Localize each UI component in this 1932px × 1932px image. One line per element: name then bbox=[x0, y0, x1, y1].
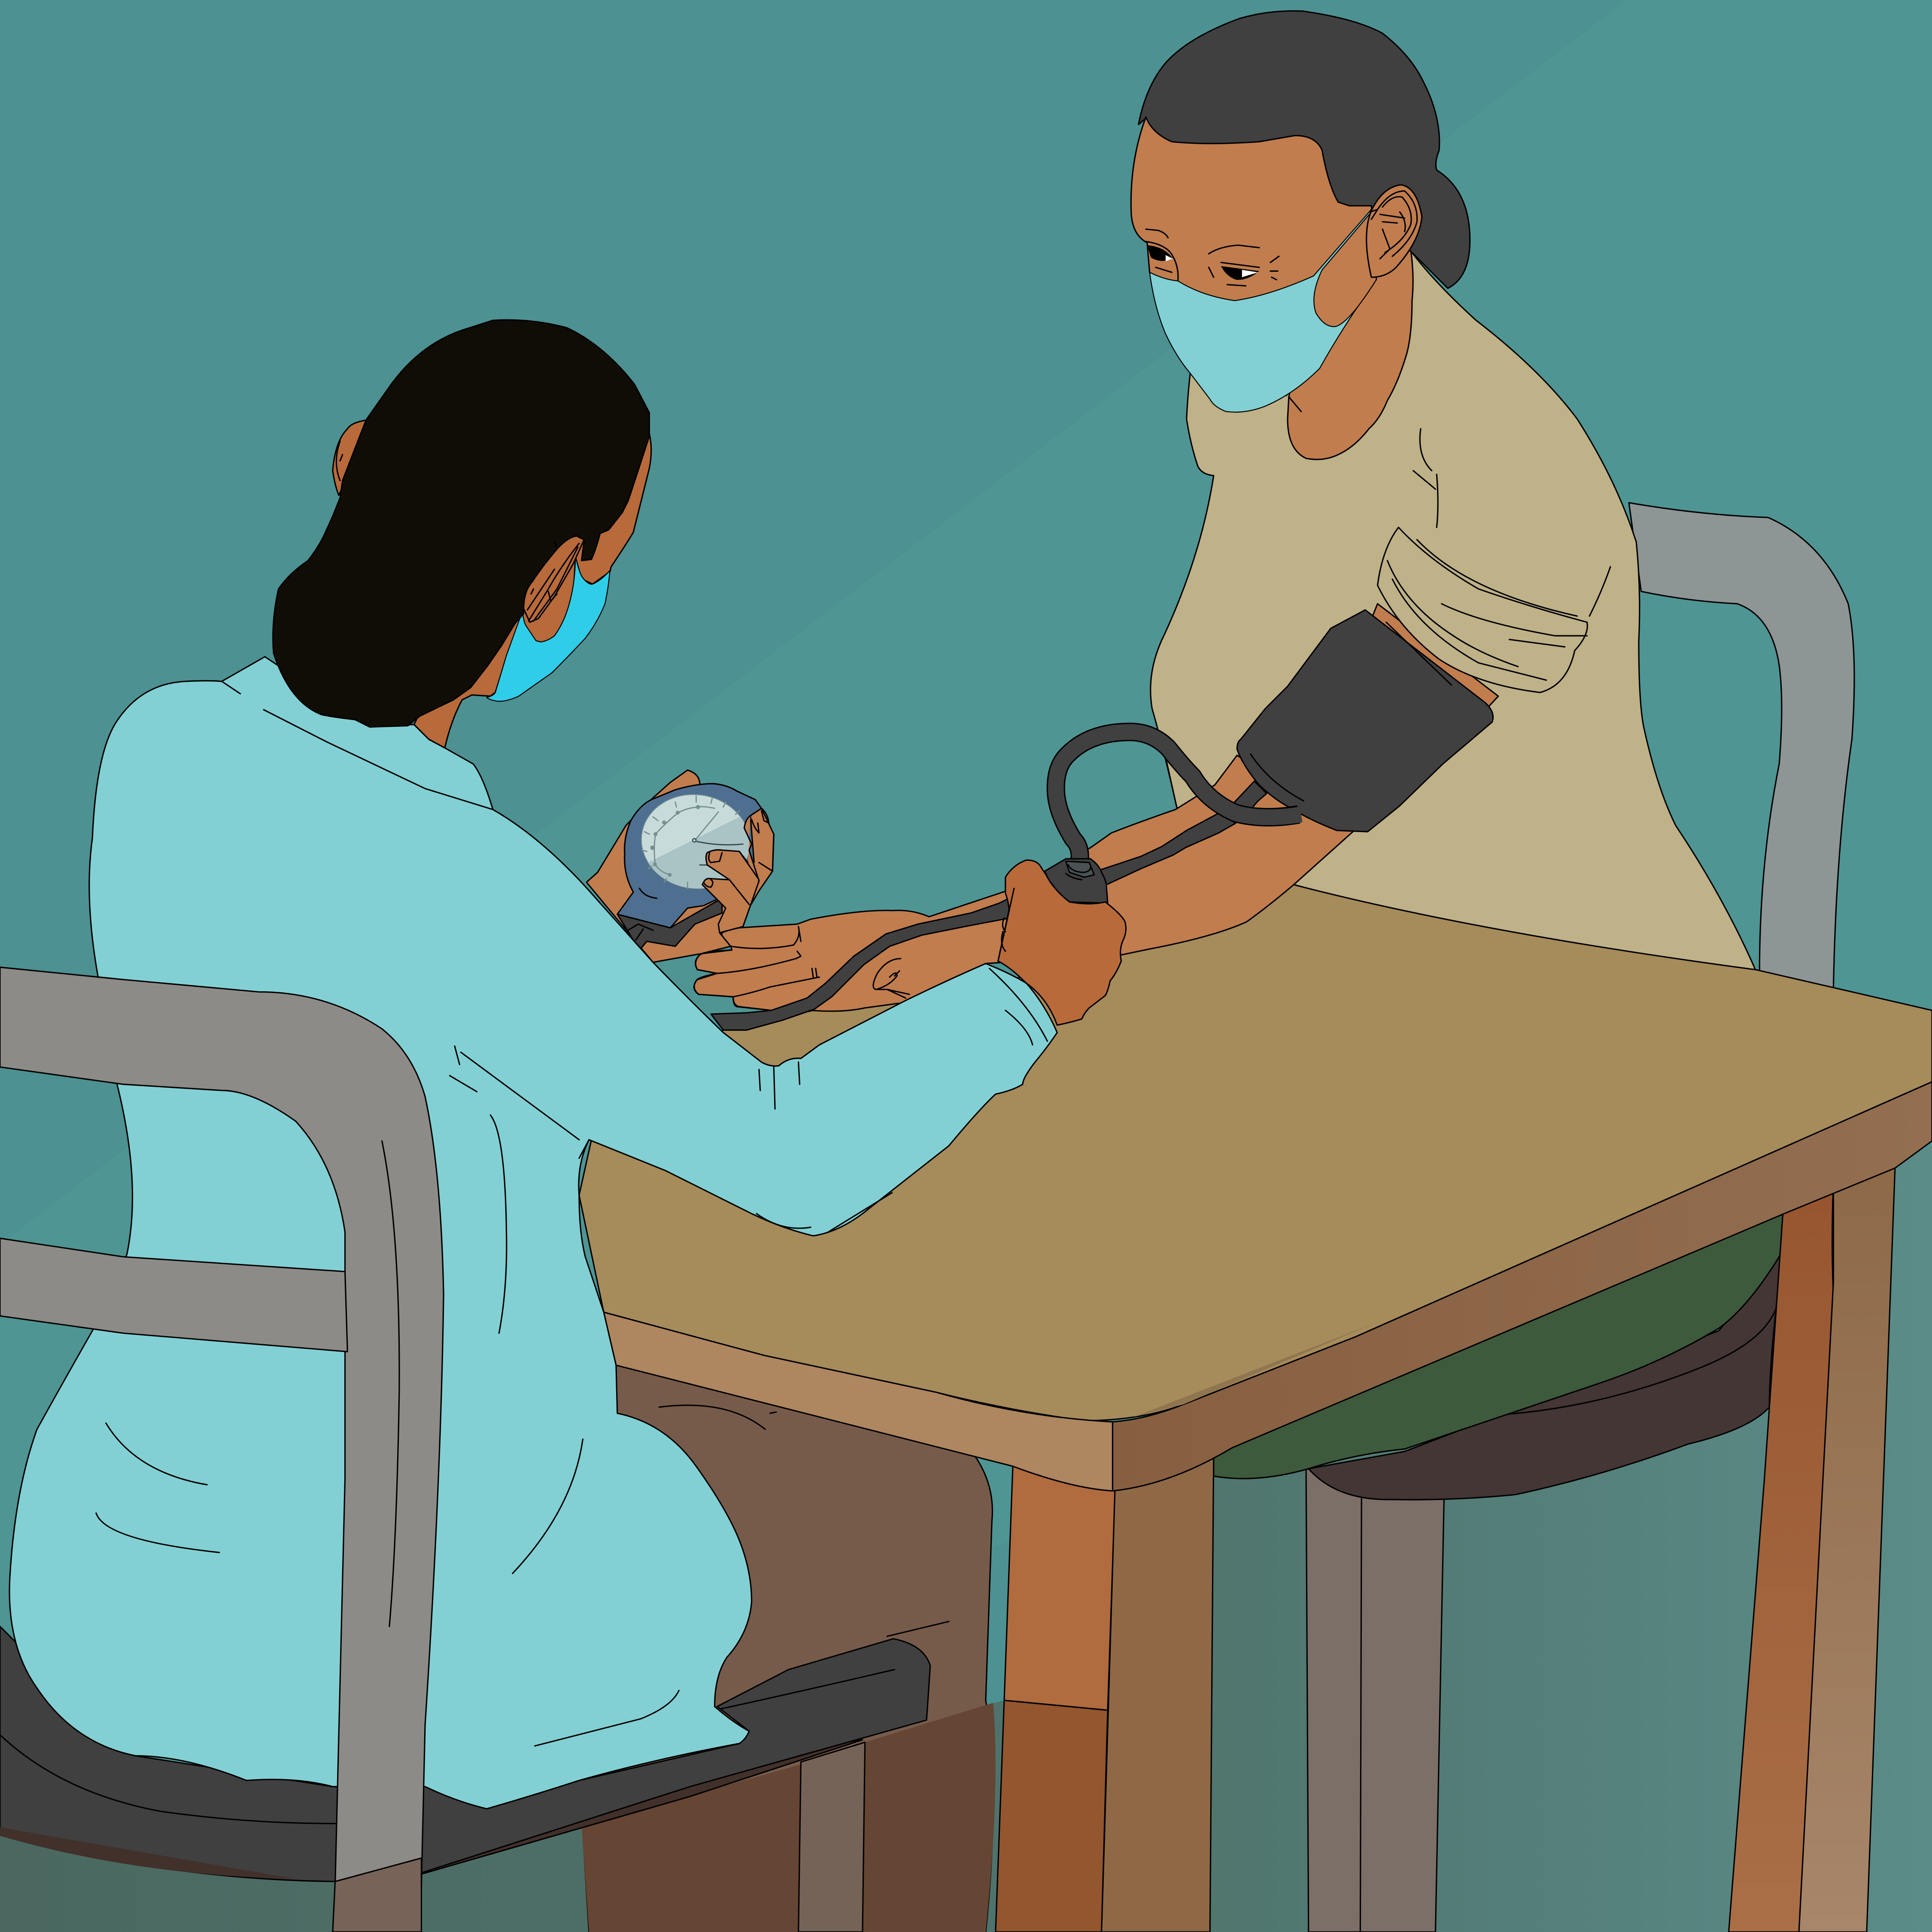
rolled sleeve bbox=[1378, 527, 1610, 693]
gauge knob bbox=[626, 924, 653, 940]
doctor's chair front leg bbox=[799, 1742, 865, 1932]
doctor's legs bbox=[582, 1365, 996, 1932]
chair shadow at floor bbox=[333, 1858, 422, 1932]
gauge base bbox=[617, 898, 722, 950]
patient head and face bbox=[1131, 11, 1470, 412]
cuff tubing along arm bbox=[711, 781, 1267, 1030]
rubber inflation bulb bbox=[1045, 859, 1108, 903]
patient upper arm skin bbox=[1368, 604, 1498, 712]
doctor's face mask bbox=[487, 556, 610, 701]
patient right eye bbox=[1209, 245, 1279, 286]
doctor's fingers under hand bbox=[998, 888, 1014, 961]
patient ear bbox=[1367, 185, 1422, 277]
patient face mask bbox=[1150, 210, 1376, 412]
table edge bbox=[604, 1082, 1932, 1491]
blood pressure cuff bbox=[1237, 610, 1493, 832]
doctor's far ear bbox=[333, 420, 370, 495]
patient skirt bbox=[1214, 1201, 1784, 1479]
front table leg, right face bbox=[1102, 1452, 1214, 1932]
patient stool seat bbox=[1309, 1251, 1783, 1500]
doctor's right hand bbox=[998, 860, 1126, 1025]
patient forearm and hand bbox=[694, 755, 1353, 1011]
patient forehead bbox=[1131, 117, 1376, 357]
gauge body bbox=[617, 784, 762, 928]
doctor's head bbox=[273, 320, 651, 748]
front table leg, left face bbox=[996, 1466, 1115, 1932]
gauge dial bbox=[641, 794, 750, 889]
doctor's hair bbox=[273, 320, 649, 727]
cuff tube loop bbox=[1056, 732, 1301, 864]
patient cheek bbox=[1314, 212, 1376, 327]
doctor's face and neck skin bbox=[414, 434, 651, 748]
patient torso bbox=[1151, 252, 1757, 973]
patient neck bbox=[1288, 246, 1413, 459]
patient left eye bbox=[1146, 229, 1178, 281]
patient stool leg bbox=[1306, 1469, 1444, 1932]
doctor's chair seat bbox=[0, 1626, 930, 1881]
patient chair back bbox=[1629, 503, 1854, 988]
doctor's coat bbox=[9, 657, 1057, 1809]
table top bbox=[579, 885, 1932, 1421]
doctor's fingers on gauge bbox=[702, 808, 774, 933]
patient hair bbox=[1139, 11, 1470, 289]
aneroid gauge bbox=[617, 784, 764, 950]
doctor's left hand behind gauge bbox=[586, 770, 774, 962]
doctor's near ear bbox=[524, 536, 584, 622]
doctor's chair back frame bbox=[0, 967, 444, 1932]
coat wrinkles bbox=[96, 681, 1047, 1746]
doctor's chair crossbar bbox=[0, 1238, 347, 1352]
right table leg bbox=[1728, 1168, 1895, 1932]
